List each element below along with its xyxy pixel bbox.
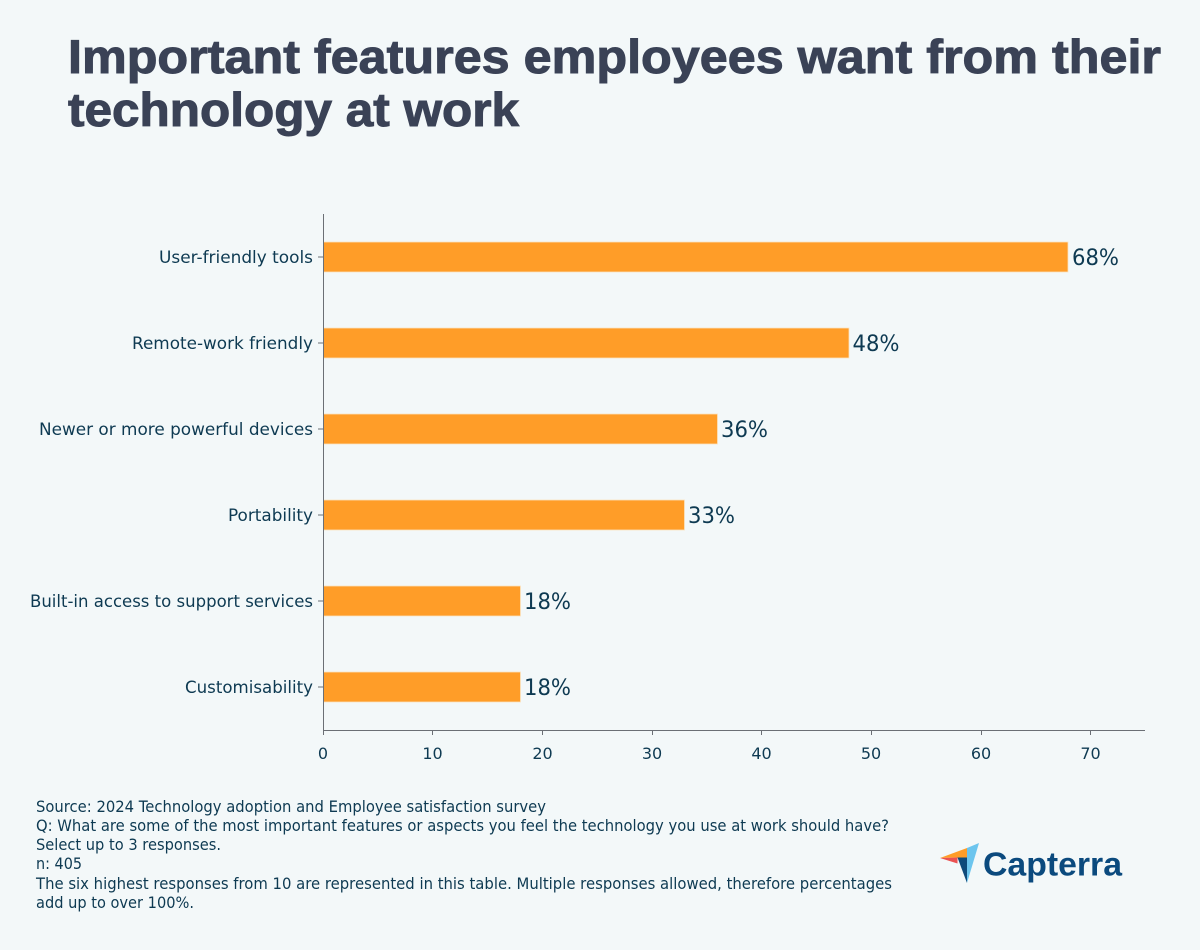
axes	[318, 214, 1145, 735]
value labels: 36%	[721, 417, 768, 443]
title: Important features employees want from their	[68, 30, 1161, 83]
y axis categories: Portability	[228, 506, 313, 526]
value labels: 33%	[688, 503, 735, 529]
y axis categories	[30, 248, 313, 698]
x axis numbers: 70	[1080, 744, 1101, 763]
bars	[324, 242, 1068, 702]
x axis numbers	[318, 744, 1101, 763]
x axis numbers: 10	[422, 744, 443, 763]
x axis numbers: 0	[318, 744, 328, 763]
logo: Capterra	[940, 843, 1122, 884]
x axis numbers: 50	[861, 744, 881, 763]
value labels: 18%	[524, 675, 571, 701]
logo: Capterra: Capterra	[983, 846, 1122, 884]
y axis categories: Remote-work friendly	[132, 334, 313, 354]
source note: Source: 2024 Technology adoption and Employee satisfaction survey	[36, 797, 546, 816]
source note: Q: What are some of the most important features or aspects you feel the technology you use at work should have?	[36, 816, 889, 835]
source note: add up to over 100%.	[36, 893, 194, 912]
value labels	[524, 245, 1119, 701]
source note: n: 405	[36, 854, 82, 873]
y axis categories: Built-in access to support services	[30, 592, 313, 612]
y axis categories: Customisability	[185, 678, 313, 698]
title: technology at work	[68, 83, 520, 136]
x axis numbers: 60	[971, 744, 991, 763]
source note: Select up to 3 responses.	[36, 835, 221, 854]
value labels: 48%	[852, 331, 900, 357]
x axis numbers: 20	[532, 744, 553, 763]
y axis categories: User-friendly tools	[159, 248, 313, 268]
icon: Capterra arrow	[940, 843, 979, 883]
value labels: 68%	[1072, 245, 1119, 271]
value labels: 18%	[524, 589, 571, 615]
x axis numbers: 30	[642, 744, 662, 763]
x axis numbers: 40	[751, 744, 772, 763]
source note: The six highest responses from 10 are represented in this table. Multiple responses allowed, therefore percentages	[35, 874, 892, 893]
bar chart	[30, 214, 1145, 763]
y axis categories: Newer or more powerful devices	[39, 420, 313, 440]
title	[68, 30, 1161, 136]
source note	[35, 797, 892, 912]
